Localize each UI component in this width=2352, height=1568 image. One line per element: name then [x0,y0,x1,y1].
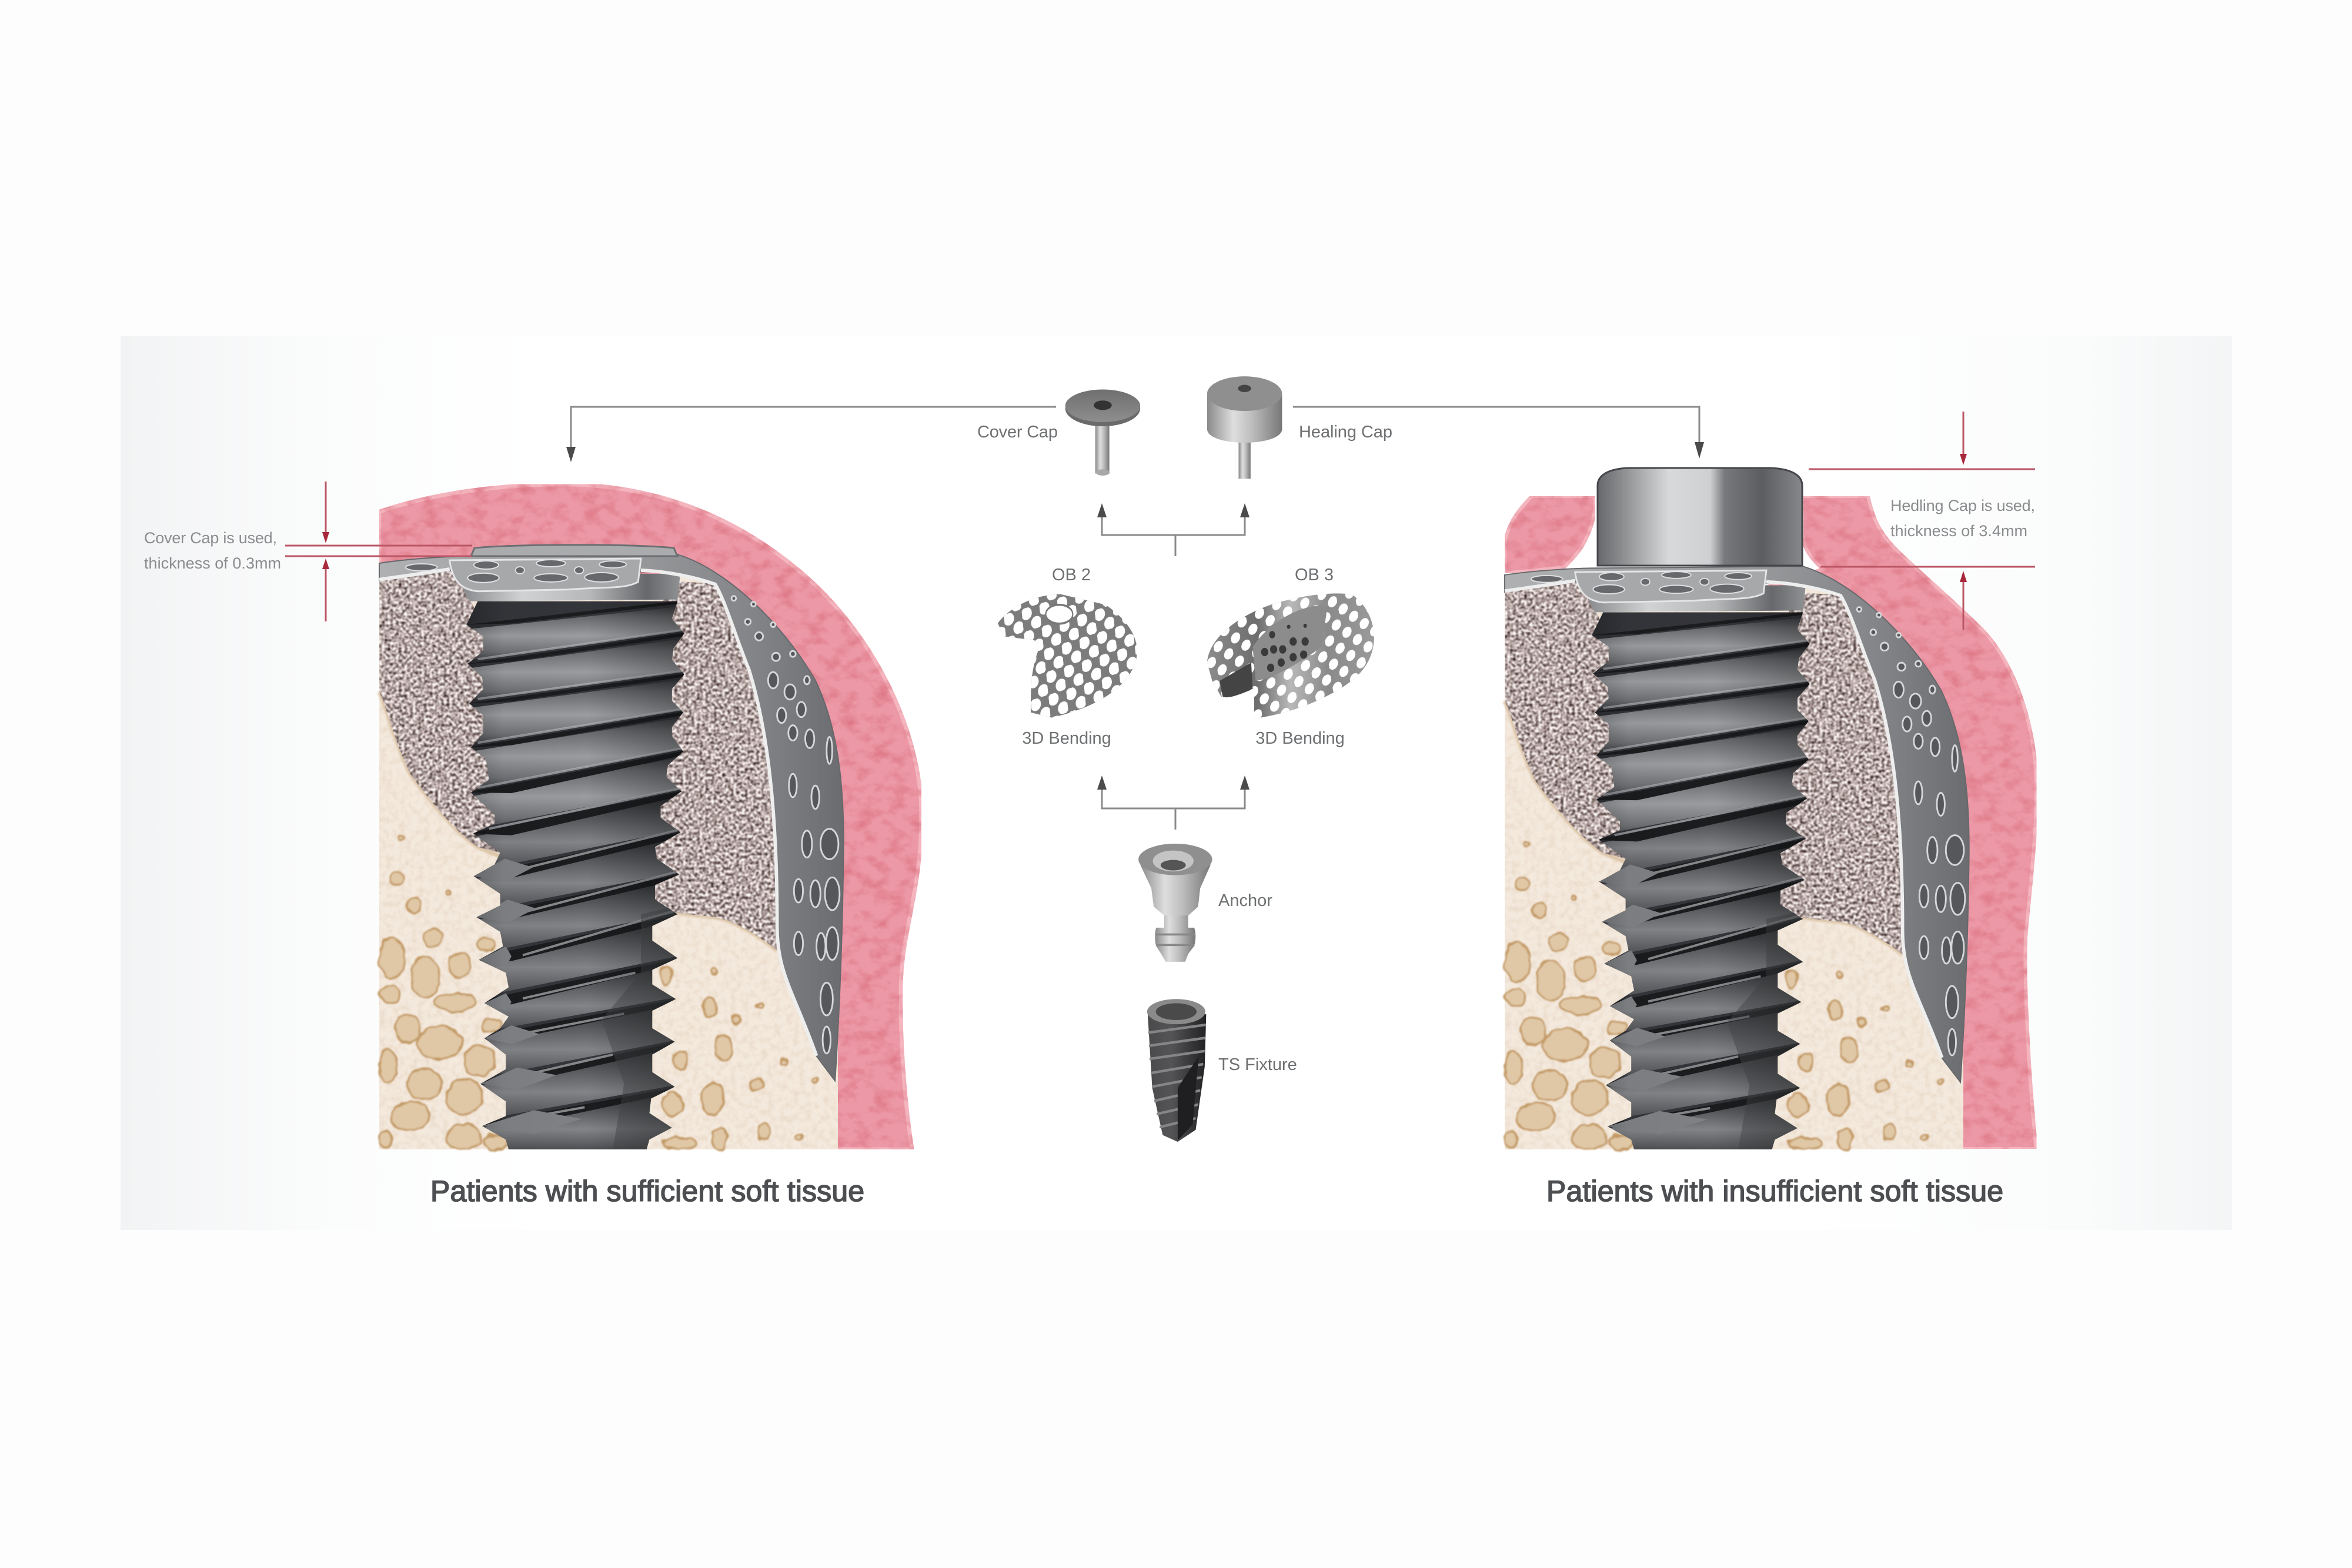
cover cap note line 2: thickness of 0.3mm [144,554,281,572]
bone graft material [379,570,779,952]
label: TS Fixture: TS Fixture [1218,1055,1297,1074]
bone pores [379,834,818,1150]
mesh inner highlight [379,569,817,1056]
fixture cutting edges [474,858,582,1134]
icon: TS fixture [1147,999,1206,1142]
background panel [121,336,2232,1230]
cover cap note: Cover Cap is used, [144,529,277,547]
gum tissue right, left part [1505,496,1595,573]
anchor plate [450,559,641,591]
healing cap note line 2: thickness of 3.4mm [1890,522,2027,540]
caption: sufficient soft tissue: Patients with sufficient soft tissue [430,1175,864,1208]
gum tissue right, right part [1764,496,2036,1149]
healing cap dimension lines [1809,412,2035,630]
arrow: cover cap to left panel [566,407,1056,462]
arrow: healing cap to right panel [1293,407,1704,459]
arrow: mesh to caps [1097,503,1250,556]
fixture collar [455,574,680,601]
label: 3D Bending OB3: 3D Bending [1255,729,1345,748]
cover cap on implant [471,545,677,556]
dental implant fixture [455,593,697,1154]
healing cap note: Hedling Cap is used, [1890,497,2035,514]
bone [379,575,838,1149]
label: OB2: OB 2 [1052,566,1091,584]
cover cap dimension lines [285,482,472,621]
anchor plate holes [406,560,626,583]
icon: anchor [1138,844,1212,962]
mesh holes [731,596,840,1054]
icon: OB2 mesh [998,594,1137,718]
label: 3D Bending OB2: 3D Bending [1022,729,1111,748]
implant cross-section artwork [379,554,844,1154]
label: Cover Cap: Cover Cap [977,423,1058,442]
annotation: cover cap thickness [144,482,472,621]
icon: cover cap [1065,390,1140,476]
icon: healing cap [1207,376,1282,479]
label: OB3: OB 3 [1295,566,1334,584]
annotation: healing cap thickness [1809,412,2035,630]
bone graft borders [379,692,777,951]
gum tissue left [379,484,921,1149]
panel: insufficient soft tissue illustration [1505,468,2036,1154]
panel: sufficient soft tissue illustration [379,484,921,1154]
fixture thread crests [466,600,686,1127]
label: Healing Cap: Healing Cap [1299,423,1392,442]
healing cap on implant [1598,468,1802,566]
icon: OB3 mesh [1207,593,1374,718]
label: Anchor: Anchor [1218,891,1272,910]
arrow: anchor to mesh [1097,775,1250,830]
implant cross-section artwork, repeated [1505,566,1969,1154]
titanium mesh [379,554,844,1081]
lower right matte cutting face [602,905,680,1149]
caption: insufficient soft tissue: Patients with insufficient soft tissue [1546,1175,2003,1208]
